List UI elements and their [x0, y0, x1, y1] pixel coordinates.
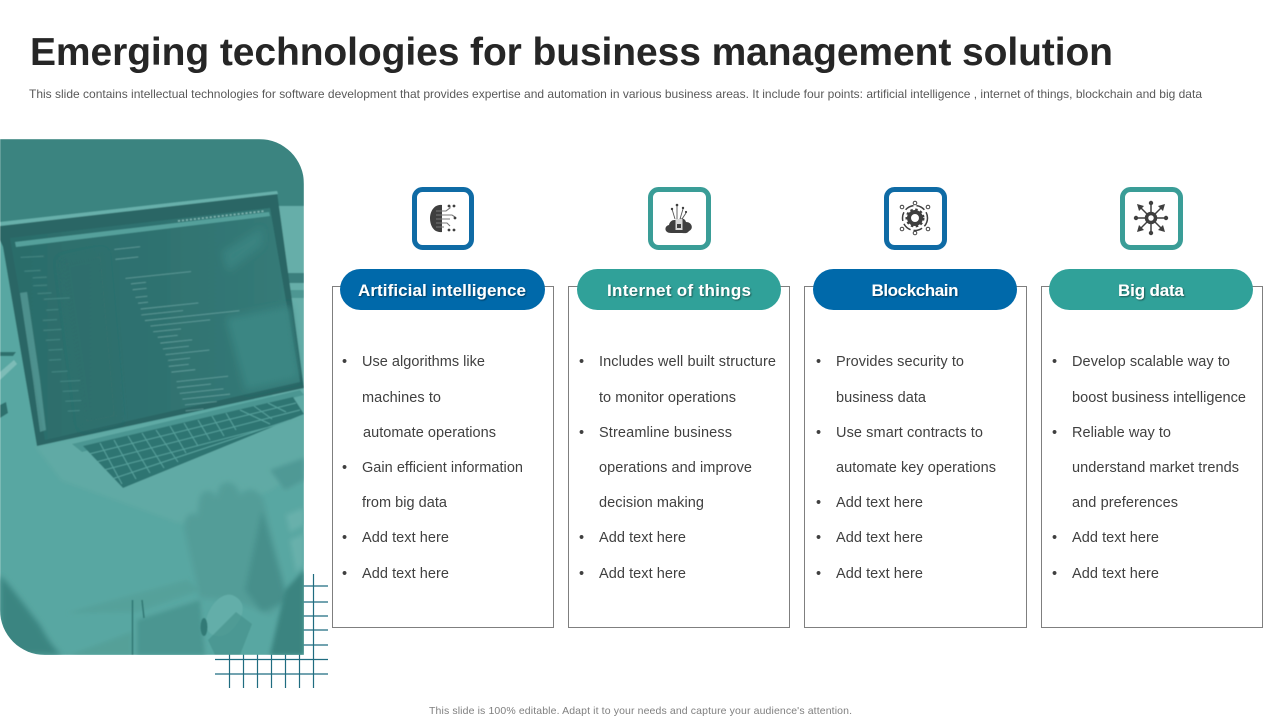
top silver lid edge — [0, 191, 278, 226]
bullet list: Gain efficient information — [362, 460, 523, 476]
icon box — [414, 190, 472, 248]
bullet list: Add text here — [1072, 566, 1159, 582]
icon: brain circuit — [430, 205, 456, 232]
card outline — [804, 286, 1026, 628]
bullet list: Use smart contracts to — [836, 425, 983, 441]
desk tray — [74, 601, 206, 655]
bullet list: • — [816, 495, 821, 511]
bullet list — [816, 354, 996, 582]
bullet list: boost business intelligence — [1072, 390, 1246, 406]
bullet list: Use algorithms like — [362, 354, 485, 370]
bullet list: to monitor operations — [599, 390, 736, 406]
watch band — [200, 595, 252, 655]
screen reflections — [226, 236, 300, 388]
bullet list: • — [816, 425, 821, 441]
bullet list: Streamline business — [599, 425, 732, 441]
subtitle: This slide contains intellectual technologies for software development that provides expertise and automation in various business areas. It include four points: artificial intelligence , internet of things, blockchain and big data — [29, 87, 1202, 101]
card outline — [568, 286, 790, 628]
card outline — [332, 286, 554, 628]
heading pill — [340, 269, 545, 310]
bullet list: • — [342, 460, 347, 476]
bullet list: Includes well built structure — [599, 354, 776, 370]
right background — [272, 206, 304, 396]
bullet list: • — [579, 354, 584, 370]
lower left shadow — [0, 575, 62, 655]
hand — [184, 482, 288, 615]
bullet list: • — [342, 354, 347, 370]
right side stripes and shadow — [270, 458, 304, 655]
bullet list: • — [816, 566, 821, 582]
heading text: Big data — [1118, 281, 1185, 300]
bullet list: • — [1052, 530, 1057, 546]
bullet list: and preferences — [1072, 495, 1178, 511]
bullet list: Add text here — [836, 495, 923, 511]
decorative grid — [215, 574, 328, 688]
bullet list: automate key operations — [836, 460, 996, 476]
bullet list: Add text here — [362, 566, 449, 582]
icon: gear network — [900, 201, 930, 235]
heading text: Blockchain — [872, 281, 958, 300]
bullet list: Add text here — [599, 566, 686, 582]
heading pill — [1049, 269, 1253, 310]
heading text: Artificial intelligence — [358, 281, 526, 300]
heading pill — [813, 269, 1017, 310]
bullet list — [1052, 354, 1246, 582]
bullet list: understand market trends — [1072, 460, 1239, 476]
left background objects — [0, 352, 17, 418]
sidebar file tree — [21, 255, 82, 413]
bullet list: • — [1052, 425, 1057, 441]
icon: cloud with lock — [665, 204, 692, 233]
keyboard — [83, 397, 304, 488]
menu bar — [15, 212, 270, 247]
hinge — [72, 390, 304, 452]
bullet list: Add text here — [1072, 530, 1159, 546]
card 3: blockchain — [804, 190, 1026, 628]
bullet list: Develop scalable way to — [1072, 354, 1230, 370]
bullet list: machines to — [362, 390, 441, 406]
icon box — [650, 190, 708, 248]
bullet list: Add text here — [362, 530, 449, 546]
title: Emerging technologies for business management solution — [30, 31, 1113, 74]
code lines — [114, 246, 240, 412]
sidebar icons strip — [20, 292, 46, 432]
bullet list — [342, 354, 523, 582]
heading pill — [577, 269, 781, 310]
bullet list: • — [579, 425, 584, 441]
bullet list: automate operations — [363, 425, 496, 441]
bullet list: • — [342, 530, 347, 546]
bullet list: • — [1052, 354, 1057, 370]
bullet list: • — [816, 354, 821, 370]
bullet list: • — [579, 566, 584, 582]
bullet list: • — [1052, 566, 1057, 582]
status text on menu bar — [178, 211, 265, 221]
photo: laptop with code on screen — [0, 139, 304, 655]
laptop deck — [72, 390, 304, 489]
bullet list: Provides security to — [836, 354, 964, 370]
icon: hub and spokes — [1134, 201, 1168, 235]
bullet list: Add text here — [599, 530, 686, 546]
screen — [40, 208, 300, 435]
card 2: internet of things — [568, 190, 790, 628]
bullet list: operations and improve — [599, 460, 752, 476]
card 1: artificial intelligence — [332, 190, 554, 628]
bullet list: Add text here — [836, 530, 923, 546]
bullet list: • — [579, 530, 584, 546]
wall behind laptop — [0, 139, 304, 222]
footer note: This slide is 100% editable. Adapt it to your needs and capture your audience's attention. — [429, 705, 852, 717]
bullet list: business data — [836, 390, 927, 406]
bullet list: Reliable way to — [1072, 425, 1171, 441]
bullet list: • — [816, 530, 821, 546]
laptop lid — [0, 192, 304, 446]
icon box — [1122, 190, 1180, 248]
heading text: Internet of things — [607, 281, 751, 300]
bullet list: decision making — [599, 495, 704, 511]
tray slot — [132, 600, 144, 655]
icon box — [886, 190, 944, 248]
card outline — [1042, 286, 1262, 628]
bullet list: • — [342, 566, 347, 582]
card 4: big data — [1042, 190, 1262, 628]
bullet list: from big data — [362, 495, 448, 511]
bullet list: Add text here — [836, 566, 923, 582]
bullet list — [579, 354, 776, 582]
